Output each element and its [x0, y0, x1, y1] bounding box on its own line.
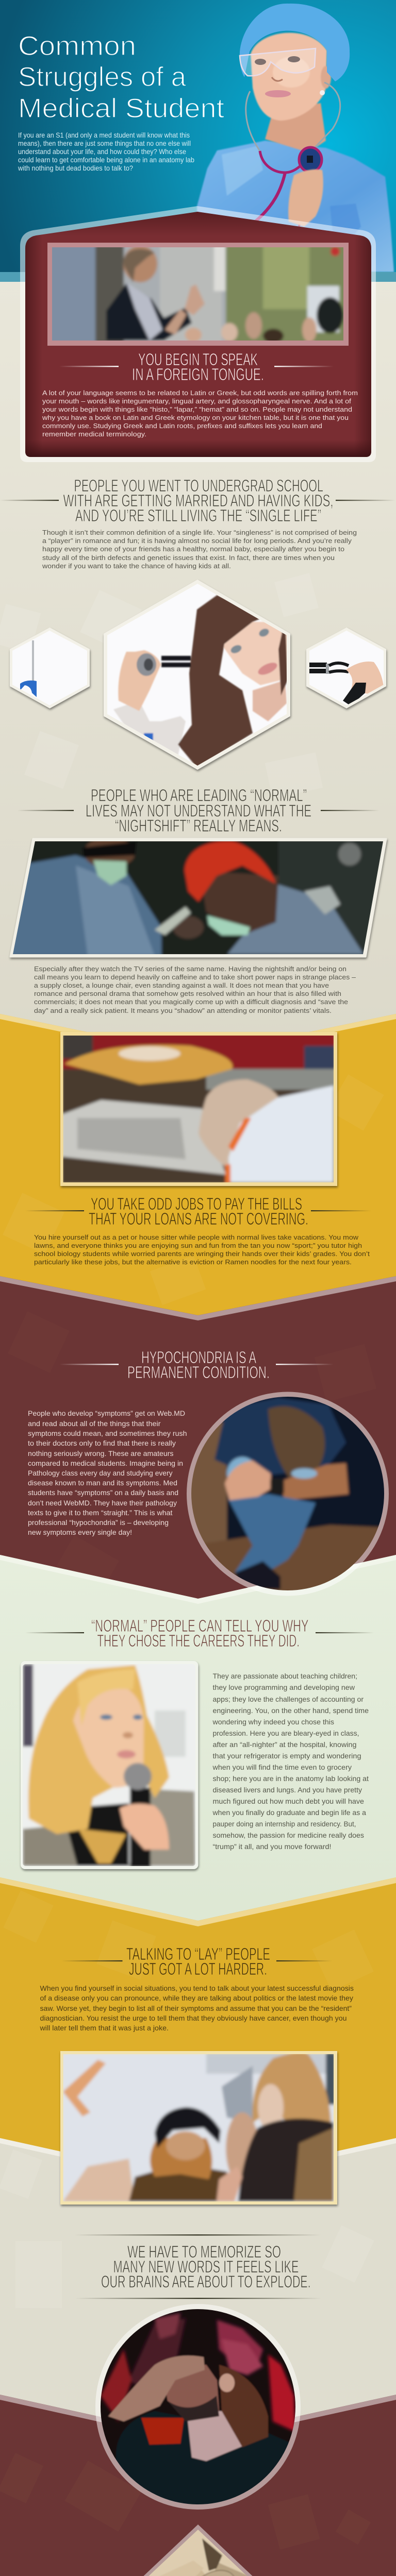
text: odd jobs: particularly like these jobs, but the alternative is eviction or Ramen noodles for the next four years.: [34, 1258, 352, 1266]
photo: man with hand over face: [98, 2306, 299, 2514]
text: careers: after an “all-nighter” at the hospital, knowing: [212, 1740, 357, 1749]
hexagon left: frame: [10, 628, 90, 708]
text: hypochondria: and read about all of the things that their: [28, 1419, 161, 1428]
text: careers: when you will find the time even to grocery: [212, 1763, 352, 1771]
background: hero: [0, 0, 396, 273]
photo frame: sepia triangle: [29, 2524, 367, 2576]
background: gold section 2: [0, 1877, 396, 2215]
text: careers: “trump” it all, and you move forward!: [212, 1842, 331, 1851]
text: lay people: saw. Worse yet, they begin to list all of their symptoms and assume that you can be the “resident”: [40, 2004, 352, 2012]
text: careers: [212, 1672, 369, 1851]
photo frame: sad man oval: [187, 1392, 389, 1596]
text: careers: apps; they love the challenges of accounting or: [212, 1695, 364, 1703]
text: hypochondria: Pathology class every day and studying every: [28, 1469, 172, 1477]
intro text: If you are an S1 (and only a med student will know what this: [18, 131, 190, 139]
photo: man hugging knees: [188, 1394, 389, 1595]
heading: hypochondria: HYPOCHONDRIA IS A: [141, 1348, 256, 1367]
text: lay people: of a disease only you can pronounce, while they are talking about politics or the latest movie they: [40, 1994, 353, 2002]
text: nightshift: commercials; it does not mean that you magically come up with a difficult diagnosis and “save the: [34, 998, 348, 1006]
photo: friends laughing: [62, 2053, 335, 2202]
photo frame: speaker: [21, 1661, 198, 1869]
text: hypochondria: symptoms could mean, and sometimes they rush: [28, 1429, 187, 1437]
text: careers: profession. Here you are bleary-eyed in class,: [212, 1729, 359, 1737]
text: hypochondria: new symptoms every single day!: [28, 1528, 132, 1536]
photo: man rubbing his eye under glasses: [148, 2530, 247, 2576]
hexagon center: frame: [104, 580, 290, 770]
photo: student writing exam: [62, 1033, 335, 1183]
title: Medical Student: [18, 93, 224, 124]
heading: memorize: WE HAVE TO MEMORIZE SO: [127, 2242, 281, 2261]
heading: memorize: [74, 2234, 321, 2299]
icon: hand: [288, 170, 323, 227]
text: hypochondria: compared to medical students. Imagine being in: [28, 1459, 183, 1467]
text: single life: study all of the birth defects and genetic issues that exist. In fact, there are times when you: [42, 554, 335, 562]
heading: YOU BEGIN TO SPEAK: [138, 350, 258, 369]
text: nightshift: romance and personal drama that somehow gets resolved within an hour that is also filled with: [34, 990, 341, 997]
text: odd jobs: You hire yourself out as a pet or house sitter while people with normal lives take vacations. You mow: [34, 1233, 359, 1241]
heading: single life: [0, 476, 395, 525]
text: single life: wonder if you want to take the chance of having kids at all.: [42, 562, 231, 570]
text: hypochondria: don’t need WebMD. They have their pathology: [28, 1499, 177, 1507]
photo frame: surgeons: [10, 839, 386, 957]
hexagon right: photo: [307, 629, 386, 707]
icon: surgical gown: [197, 141, 394, 272]
body text: commonly use. Studying Greek and Latin roots, prefixes and suffixes lets you learn and: [42, 422, 322, 430]
text: careers: They are passionate about teaching children;: [212, 1672, 357, 1680]
text: single life: happy every time one of your friends has a healthy, normal baby, especially after you begin to: [42, 545, 344, 553]
text: careers: much figured out how much debt you will have: [212, 1797, 364, 1805]
text: hypochondria: disease known to man and its symptoms. Med: [28, 1479, 177, 1487]
panel body: [25, 212, 371, 457]
heading: IN A FOREIGN TONGUE.: [132, 365, 264, 384]
heading: hypochondria: [59, 1348, 334, 1382]
text: nightshift: Especially after they watch the TV series of the same name. Having the nightshift and/or being on: [34, 965, 346, 973]
text: nightshift: [34, 965, 356, 1014]
photo frame: exam: [60, 1032, 337, 1186]
text: nightshift: call means you learn to depend heavily on caffeine and to take short power naps in strange places –: [34, 973, 356, 981]
text: lay people: diagnostician. You resist the urge to tell them that they obviously have cancer, even though you: [40, 2014, 346, 2022]
title: Struggles of a: [18, 62, 187, 92]
text: hypochondria: professional “hypochondria” is – developing: [28, 1518, 169, 1527]
photo: woman speaking into microphone: [21, 1662, 199, 1868]
body text: your words begin with things like “histo,” “lapar,” “hemat” and so on. People may not understand: [42, 405, 352, 413]
photo frame: explode oval: [95, 2304, 301, 2510]
text: careers: diseased livers and lungs. And you have pretty: [212, 1786, 362, 1794]
intro text: understand about your life, and how could they? Who else: [18, 147, 186, 156]
intro text: means), then there are just some things that no one else will: [18, 139, 191, 147]
heading: nightshift: “NIGHTSHIFT” REALLY MEANS.: [115, 816, 282, 835]
text: hypochondria: students have “symptoms” on a daily basis and: [28, 1488, 178, 1497]
heading: lay people: TALKING TO “LAY” PEOPLE: [126, 1944, 270, 1963]
panel frame: [20, 206, 376, 462]
intro text: [18, 131, 194, 172]
heading: careers: [25, 1616, 374, 1650]
text: odd jobs: lawns, and everyone thinks you are enjoying sun and fun from the tan you now “sport;” you tutor high: [34, 1242, 362, 1249]
intro text: could learn to get comfortable being alone in an anatomy lab: [18, 156, 194, 164]
text: odd jobs: [34, 1233, 370, 1266]
panel: you begin to speak in a foreign tongue: [20, 206, 376, 462]
body text: why you have a book on Latin and Greek etymology on your kitchen table, but it is one that you: [42, 414, 349, 421]
text: single life: [42, 529, 357, 570]
body text: remember medical terminology.: [42, 430, 146, 438]
text: careers: when you finally do graduate and begin life as a: [212, 1808, 366, 1817]
background: gold section 1: [0, 1014, 396, 1340]
text: lay people: [39, 1984, 354, 2032]
photo frame: [47, 243, 349, 346]
icon: facial features and glasses: [240, 48, 325, 97]
body text: A lot of your language seems to be related to Latin or Greek, but odd words are spilling forth from: [42, 389, 358, 397]
heading: hypochondria: PERMANENT CONDITION.: [127, 1363, 270, 1382]
text: lay people: When you find yourself in social situations, you tend to talk about your latest successful diagnosis: [40, 1984, 354, 1992]
heading: memorize: MANY NEW WORDS IT FEELS LIKE: [113, 2257, 299, 2276]
text: single life: a “player” in romance and fun; it is having almost no social life for long periods. And you’re really: [42, 537, 352, 545]
text: careers: engineering. You, on the other hand, spend time: [212, 1706, 369, 1715]
icon: stethoscope: [246, 82, 340, 227]
background: cream section with hero band: [0, 272, 396, 1045]
title: [18, 31, 224, 124]
hexagon right: frame: [306, 628, 386, 708]
background: maroon section 1: [0, 1276, 396, 1649]
title: Common: [18, 31, 136, 61]
photo: lecturer speaking: [49, 242, 345, 343]
icon: surgical cap: [240, 4, 350, 81]
heading: nightshift: [18, 786, 379, 835]
text: careers: somehow, the passion for medicine really does: [212, 1831, 364, 1839]
text: hypochondria: People who develop “symptoms” get on Web.MD: [28, 1409, 185, 1417]
heading: [59, 350, 334, 384]
text: odd jobs: school biology students while worried parents are wringing their hands over their kids’ grades. You don’t: [34, 1250, 370, 1258]
text: careers: wondering why indeed you chose this: [212, 1718, 334, 1726]
text: lay people: will later tell them that it was just a joke.: [39, 2024, 169, 2032]
body text: [42, 389, 358, 438]
photo frame: friends: [60, 2051, 337, 2205]
background: maroon section 2: [0, 2395, 396, 2576]
heading: lay people: [62, 1944, 332, 1978]
hexagon center: woman with stethoscope: [106, 582, 289, 768]
intro text: with nothing but dead bodies to talk to?: [18, 164, 133, 172]
photo: medical student in scrubs: [197, 4, 394, 272]
body text: your mouth – words like integumentary, lingual artery, and glossopharyngeal nerve. And a lot of: [42, 397, 351, 405]
text: careers: they love programming and developing new: [212, 1683, 355, 1691]
heading: odd jobs: [25, 1194, 371, 1228]
background: green section: [0, 1555, 396, 1958]
text: hypochondria: [28, 1409, 187, 1536]
icon: face and neck: [251, 33, 331, 152]
background: cream section 2: [0, 2138, 396, 2473]
heading: lay people: JUST GOT A LOT HARDER.: [129, 1959, 267, 1978]
text: careers: pauper doing an internship and residency. But,: [212, 1820, 356, 1828]
text: hypochondria: nothing seriously wrong. These are amateurs: [28, 1449, 173, 1458]
text: nightshift: day” and a really sick patient. It means you “shadow” an attending or monitor patients’ vitals.: [34, 1007, 332, 1014]
text: single life: Though it isn’t their common definition of a single life. Your “singleness” is not comprised of being: [42, 529, 357, 536]
text: careers: shop; here you are in the anatomy lab looking at: [212, 1774, 369, 1783]
hexagon left: photo: [12, 631, 87, 705]
text: hypochondria: to their doctors only to find that there is really: [28, 1439, 176, 1447]
text: hypochondria: texts to give it to them “straight.” This is what: [28, 1509, 173, 1517]
photo: surgeons at night: [10, 837, 387, 957]
text: careers: that your refrigerator is empty and wondering: [212, 1752, 361, 1760]
text: nightshift: a supply closet, a lounge chair, even standing against a wall. It does not mean that you have: [34, 981, 329, 989]
